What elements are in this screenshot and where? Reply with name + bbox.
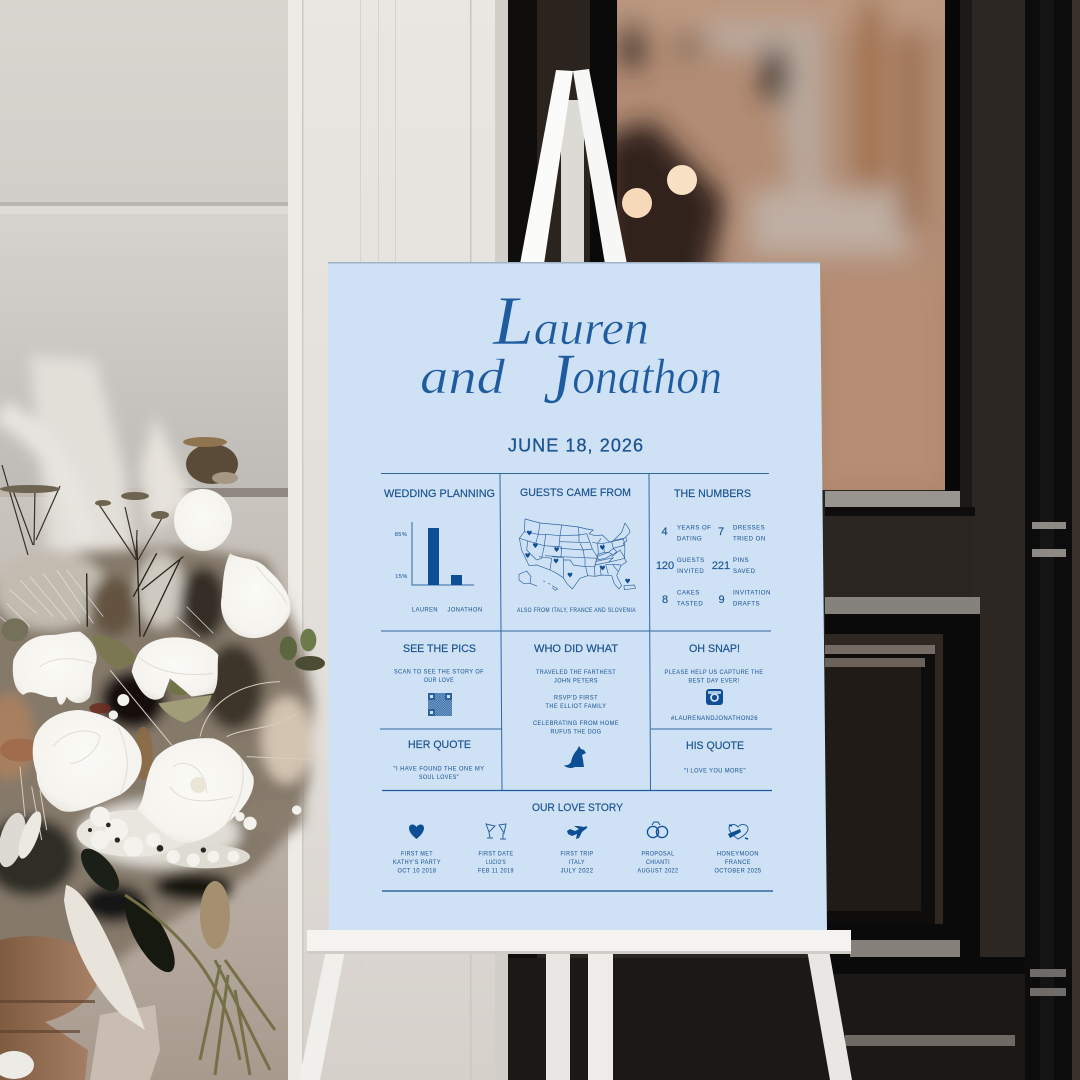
- guest hearts: ♥: [525, 552, 531, 560]
- background: white pilaster: [288, 0, 509, 1080]
- milestone: first met: [393, 824, 441, 874]
- bar chart: 15%: [395, 574, 408, 580]
- top peony: [174, 489, 232, 551]
- milestone: first trip: ITALY: [569, 860, 585, 866]
- icon: dog: [564, 746, 586, 768]
- white fern: [64, 885, 145, 1030]
- bar chart: [395, 522, 482, 614]
- dark twigs: [87, 540, 183, 637]
- stat: 7 dresses tried on: [718, 526, 766, 542]
- title: couple names: and: [420, 348, 506, 404]
- straw sprigs: [20, 670, 312, 840]
- milestone: first met: KATHY'S PARTY: [393, 860, 441, 866]
- milestone: honeymoon: [714, 824, 762, 874]
- palm frond: [125, 895, 275, 1075]
- milestone: proposal: [638, 822, 679, 874]
- bar chart: JONATHON: [448, 608, 482, 614]
- US map: [519, 519, 636, 590]
- milestone: proposal: PROPOSAL: [642, 852, 675, 858]
- icon: cocktail glasses: [486, 824, 506, 839]
- panel: wedding planning: [384, 488, 495, 614]
- guest hearts: ♥: [526, 530, 532, 538]
- milestone: proposal: AUGUST 2022: [638, 868, 679, 874]
- window with blurred reflection: [600, 0, 960, 510]
- panel: our love story: [393, 802, 762, 874]
- guest hearts: ♥: [553, 558, 559, 566]
- panel: the numbers: [656, 488, 771, 608]
- icon: heart with plane: [728, 824, 748, 839]
- stat: 7 dresses tried on: TRIED ON: [733, 536, 766, 542]
- milestone: first date: FEB 11 2019: [478, 868, 514, 874]
- milestone: first trip: JULY 2022: [560, 868, 594, 874]
- panel: his quote: "I LOVE YOU MORE": [684, 768, 746, 774]
- dried seed-head stems: [2, 465, 162, 560]
- stat: 7 dresses tried on: 7: [718, 526, 724, 538]
- panel: guests came from: GUESTS CAME FROM: [520, 487, 631, 499]
- stat: 221 pins saved: PINS: [733, 558, 749, 564]
- stat: 120 guests invited: GUESTS: [677, 558, 705, 564]
- guest hearts: ♥: [599, 544, 605, 552]
- panel: who did what: RSVP'D FIRST: [554, 696, 598, 702]
- panel: who did what: RUFUS THE DOG: [550, 730, 602, 736]
- milestone: first date: LUCIO'S: [486, 860, 506, 866]
- panel: see the pics: OUR LOVE: [424, 678, 454, 684]
- baby's breath: [77, 694, 301, 868]
- milestone: first met: FIRST MET: [401, 852, 433, 858]
- guest hearts: ♥: [554, 546, 560, 554]
- stat: 120 guests invited: [656, 558, 705, 575]
- panel: the numbers: THE NUMBERS: [674, 488, 751, 500]
- flower arrangement: [0, 355, 325, 1080]
- stat: 4 years of dating: DATING: [677, 536, 702, 542]
- panel: oh snap: OH SNAP!: [689, 643, 740, 655]
- lower dark leaves: [0, 809, 230, 979]
- title: couple names: onathon: [572, 348, 722, 404]
- background: wall panels: [0, 0, 290, 1080]
- milestone: honeymoon: OCTOBER 2025: [714, 868, 762, 874]
- petal shadows: [40, 567, 287, 823]
- guest hearts: [525, 530, 631, 586]
- panel: his quote: HIS QUOTE: [686, 740, 744, 752]
- panel: see the pics: SEE THE PICS: [403, 643, 476, 655]
- stat: 7 dresses tried on: DRESSES: [733, 526, 765, 532]
- QR code: [428, 693, 452, 716]
- foliage base and peonies traced on a 3x grid: [0, 540, 325, 973]
- panel: his quote: [684, 740, 746, 774]
- panel: see the pics: [394, 643, 484, 716]
- stat: 120 guests invited: INVITED: [677, 569, 704, 575]
- guest hearts: ♥: [567, 571, 573, 579]
- icon: airplane: [567, 826, 587, 839]
- grid lines: [380, 474, 773, 891]
- panel: who did what: WHO DID WHAT: [534, 643, 618, 655]
- icon: wedding rings: [647, 822, 668, 838]
- panel: oh snap: PLEASE HELP US CAPTURE THE: [664, 670, 764, 676]
- peonies: [221, 553, 291, 638]
- stat: 4 years of dating: 4: [661, 526, 668, 538]
- plinth behind urn: [90, 1005, 160, 1080]
- stat: 9 invitation drafts: DRAFTS: [733, 602, 760, 608]
- milestone: first met: OCT 10 2018: [398, 868, 437, 874]
- stat: 9 invitation drafts: [718, 590, 771, 608]
- panel: her quote: "I HAVE FOUND THE ONE MY: [394, 766, 484, 772]
- panel: see the pics: SCAN TO SEE THE STORY OF: [394, 670, 484, 676]
- icon: heart: [409, 824, 424, 839]
- panel: who did what: JOHN PETERS: [554, 678, 598, 684]
- sign board: [328, 262, 827, 930]
- title: couple names: J: [543, 339, 575, 419]
- stat: 120 guests invited: 120: [656, 560, 674, 572]
- panel: who did what: THE ELLIOT FAMILY: [546, 704, 606, 710]
- milestone: first trip: FIRST TRIP: [560, 852, 594, 858]
- stat: 8 cakes tasted: CAKES: [677, 590, 700, 596]
- panel: oh snap: #LAURENANDJONATHON26: [671, 716, 758, 722]
- stat: 8 cakes tasted: 8: [662, 594, 668, 606]
- foliage mass: [0, 547, 313, 973]
- date: JUNE 18, 2026: [508, 436, 643, 456]
- milestone: proposal: CHIANTI: [646, 860, 670, 866]
- panel: who did what: [533, 643, 619, 768]
- bar chart: LAUREN: [412, 608, 438, 614]
- panel: her quote: HER QUOTE: [408, 739, 471, 751]
- stat: 9 invitation drafts: INVITATION: [733, 590, 771, 596]
- rust ferns: [0, 703, 153, 780]
- urn: [0, 936, 100, 1080]
- panel: who did what: CELEBRATING FROM HOME: [533, 721, 619, 727]
- guest hearts: ♥: [625, 578, 631, 586]
- title: couple names: Lauren: [492, 283, 649, 360]
- milestone: first date: [478, 824, 514, 874]
- stat: 8 cakes tasted: TASTED: [677, 602, 703, 608]
- dried brown bloom: [183, 437, 238, 484]
- door panel mouldings: [825, 491, 1066, 1046]
- stat: 9 invitation drafts: 9: [718, 594, 725, 606]
- guest hearts: ♥: [532, 542, 538, 550]
- milestone: first date: FIRST DATE: [478, 852, 514, 858]
- panel: oh snap: [664, 643, 764, 722]
- panel: her quote: SOUL LOVES": [419, 775, 459, 781]
- panel: who did what: TRAVELED THE FARTHEST: [536, 670, 616, 676]
- seed heads: [0, 485, 169, 519]
- base white blossom: [0, 1051, 34, 1079]
- Alaska, Hawaii, Puerto Rico: [519, 571, 537, 586]
- milestone: honeymoon: FRANCE: [725, 860, 751, 866]
- milestone: first trip: [560, 826, 594, 874]
- panel: wedding planning: WEDDING PLANNING: [384, 488, 495, 500]
- feather hatching: [0, 570, 213, 637]
- title: couple names: [420, 283, 722, 419]
- icon: camera: [706, 689, 723, 705]
- stat: 4 years of dating: YEARS OF: [677, 526, 711, 532]
- panel: our love story: OUR LOVE STORY: [532, 802, 624, 814]
- stat: 221 pins saved: [712, 558, 756, 575]
- background: black door: [508, 0, 1080, 1080]
- pampas plumes: [0, 355, 195, 570]
- stat: 221 pins saved: SAVED: [733, 569, 756, 575]
- milestone: honeymoon: HONEYMOON: [717, 852, 759, 858]
- panel: guests came from: ALSO FROM ITALY, FRANCE AND SLOVENIA: [517, 608, 636, 614]
- panel: oh snap: BEST DAY EVER!: [688, 678, 740, 684]
- panel: her quote: [394, 739, 484, 781]
- guest hearts: ♥: [600, 565, 606, 573]
- panel: guests came from: [517, 487, 636, 614]
- easel: [299, 69, 852, 1080]
- stat: 4 years of dating: [661, 526, 711, 542]
- stat: 221 pins saved: 221: [712, 560, 730, 572]
- bar chart: 85%: [395, 532, 407, 538]
- stat: 8 cakes tasted: [662, 590, 703, 608]
- olive leaves: [2, 618, 325, 723]
